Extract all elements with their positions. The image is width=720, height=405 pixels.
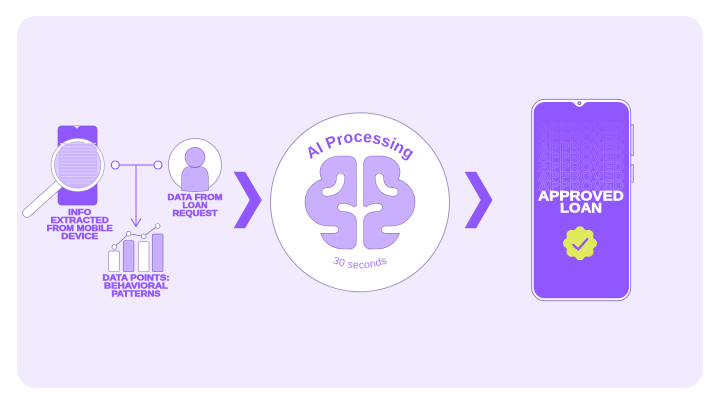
icon: small phone <box>58 126 97 205</box>
decoration: repeated outlined approved text: APPROVED <box>538 140 624 155</box>
label: data points behavioral patterns: PATTERNS <box>112 288 161 298</box>
label: data points behavioral patterns: DATA POINTS: <box>102 272 170 282</box>
decoration: repeated outlined approved text <box>538 120 624 194</box>
icon: approval badge <box>563 226 597 260</box>
icon: phone side buttons <box>630 124 634 182</box>
label: info extracted from mobile device: EXTRACTED <box>51 215 109 225</box>
chart: behavioral bars and trend line <box>109 224 163 272</box>
decoration: repeated outlined approved text: APPROVED <box>538 120 624 136</box>
label: data points behavioral patterns: BEHAVIORAL <box>104 280 168 290</box>
heading: approved loan: LOAN <box>560 200 602 216</box>
label: info extracted from mobile device: DEVICE <box>61 231 99 241</box>
label: data from loan request: REQUEST <box>172 208 218 218</box>
icon: magnifying glass <box>27 138 104 213</box>
heading: AI Processing: AI Processing <box>308 133 414 160</box>
label: 30 seconds: 30 seconds <box>333 256 386 268</box>
icon: brain <box>305 156 415 249</box>
label: data from loan request <box>168 192 223 218</box>
connector: branching arrow <box>111 161 162 226</box>
label: info extracted from mobile device <box>47 207 113 241</box>
decoration: repeated outlined approved text: APPROVED <box>538 179 624 194</box>
decoration: repeated outlined approved text: APPROVED <box>538 169 624 184</box>
heading: approved loan: APPROVED <box>538 188 624 204</box>
heading: approved loan <box>538 188 624 216</box>
group: data sources <box>27 126 223 298</box>
decoration: repeated outlined approved text: APPROVED <box>538 130 624 145</box>
arrow: chevron to AI processing <box>234 172 262 228</box>
label: data from loan request: LOAN <box>182 200 208 210</box>
decoration: repeated outlined approved text: APPROVED <box>538 150 624 165</box>
icon: person avatar <box>168 138 222 192</box>
decoration: repeated outlined approved text: APPROVED <box>538 159 624 174</box>
label: data points behavioral patterns <box>102 272 170 298</box>
label: data from loan request: DATA FROM <box>168 192 223 202</box>
label: info extracted from mobile device: FROM MOBILE <box>47 223 113 233</box>
panel: approved phone <box>532 99 634 301</box>
label: info extracted from mobile device: INFO <box>68 207 92 217</box>
arrow: chevron to approved phone <box>465 172 492 228</box>
panel: AI processing circle <box>270 112 450 292</box>
icon: phone body <box>532 99 631 301</box>
